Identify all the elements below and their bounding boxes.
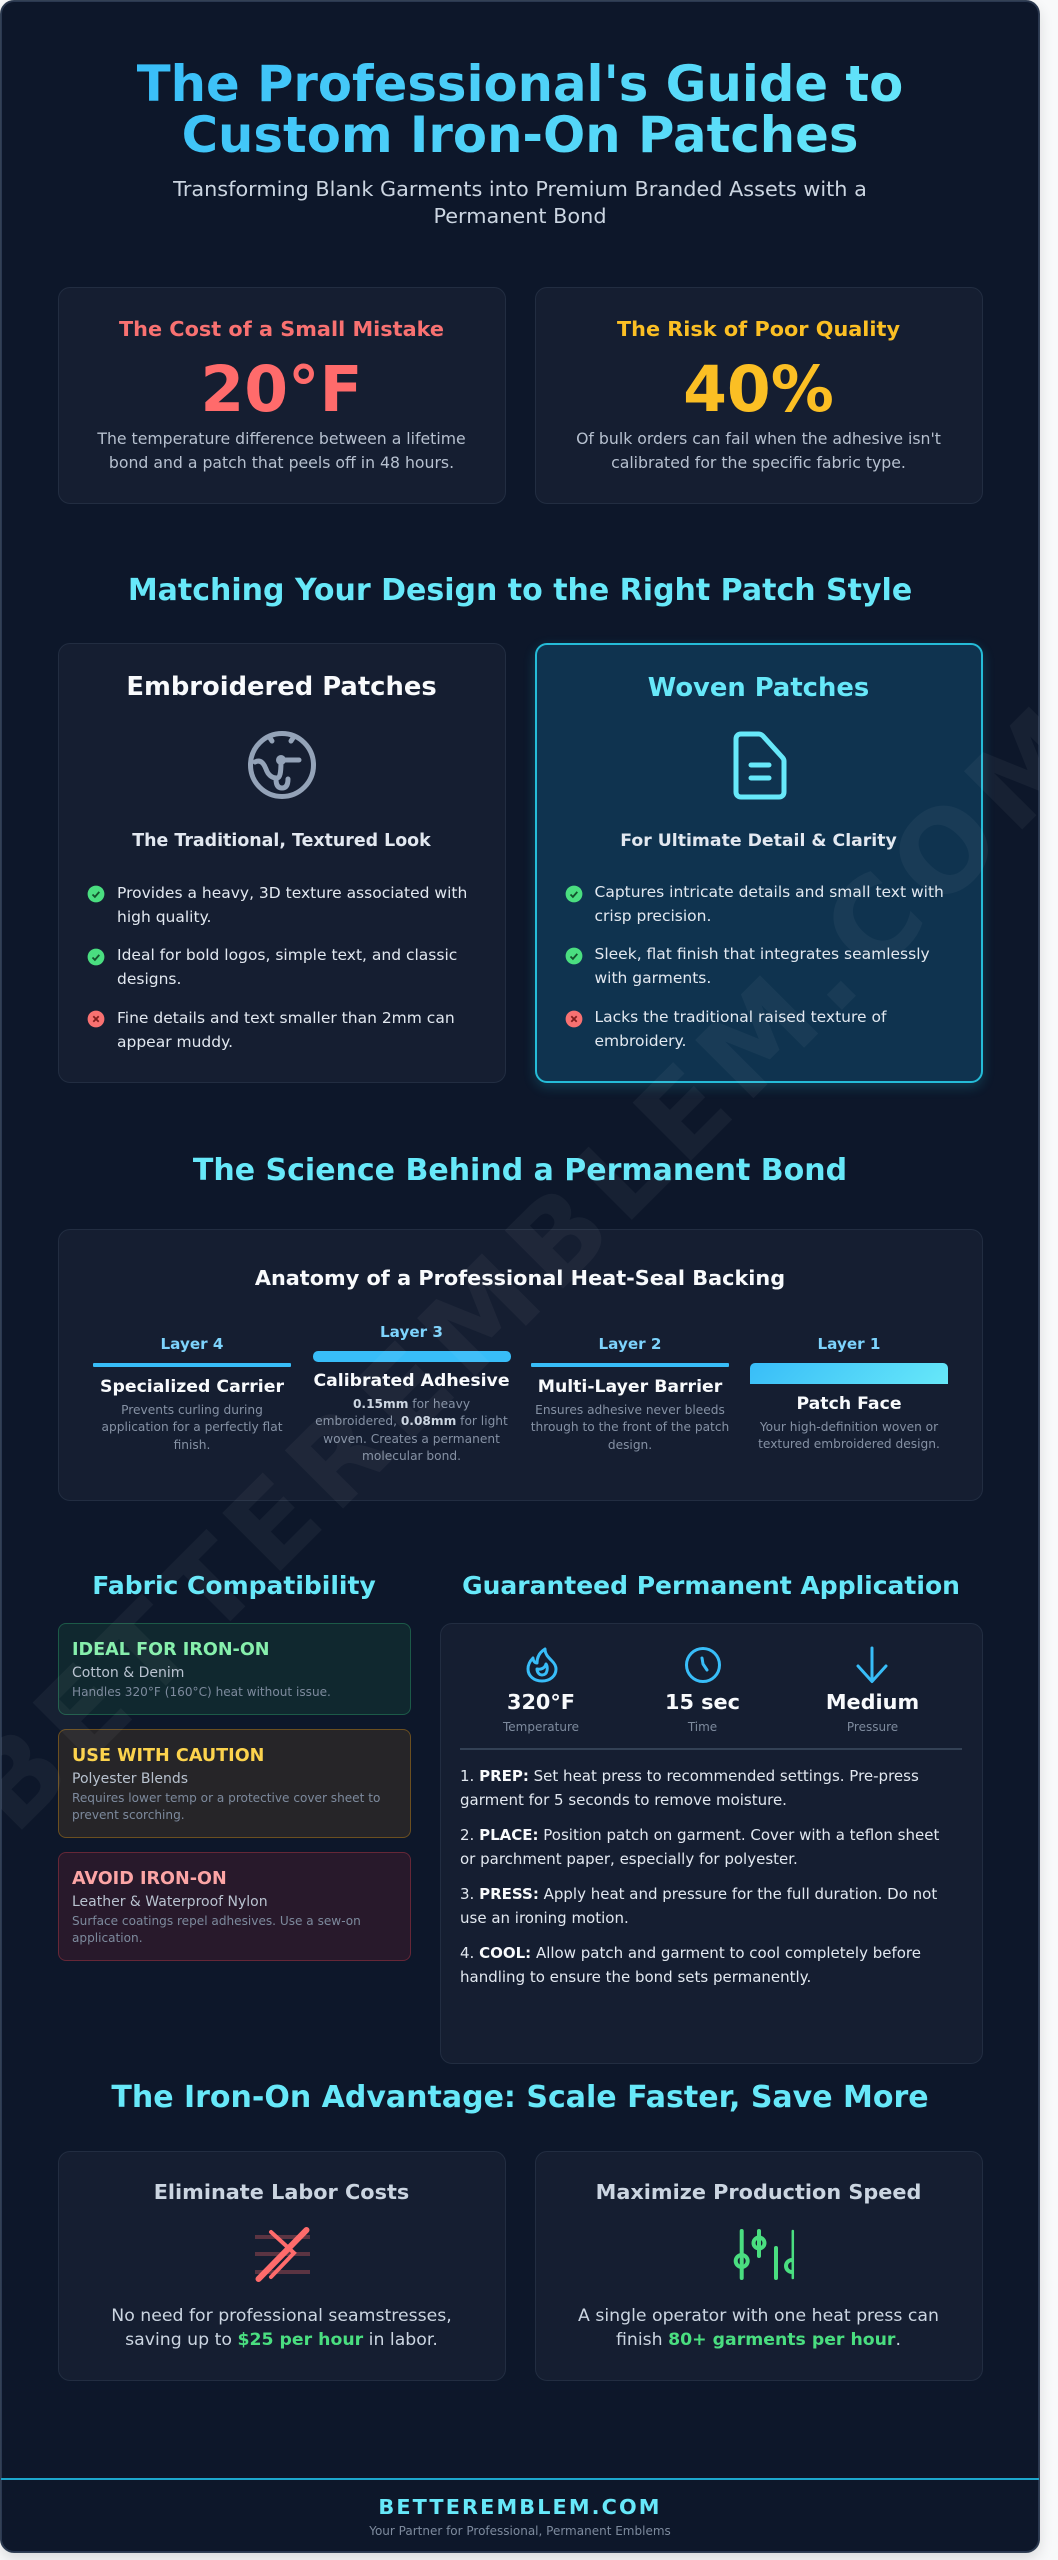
stat value: 20°F [200, 353, 363, 426]
layer label: Layer 4 [160, 1335, 224, 1353]
fabric verdict: USE WITH CAUTION [72, 1746, 264, 1766]
footer [1, 2478, 1039, 2553]
layer label: Layer 1 [817, 1335, 881, 1353]
layer name: Specialized Carrier [100, 1376, 284, 1396]
layer description [102, 1403, 282, 1452]
stat card: risk of poor quality [534, 287, 982, 504]
fabric name: Polyester Blends [72, 1770, 188, 1786]
panel subheading: The Traditional, Textured Look [132, 831, 431, 851]
benefit text: crisp precision. [594, 907, 711, 925]
fabric verdict: AVOID IRON-ON [72, 1869, 227, 1889]
layer description: Ensures adhesive never bleeds [535, 1403, 725, 1417]
panel: woven patches [534, 643, 982, 1083]
fabric card: avoid [58, 1852, 411, 1961]
icon: crossed-out stitching [255, 2227, 310, 2282]
subtitle: Permanent Bond [433, 204, 607, 228]
layer 4 [93, 1335, 291, 1452]
layer description: embroidered, 0.08mm for light [315, 1414, 508, 1428]
fabric note: prevent scorching. [72, 1808, 185, 1822]
card text: No need for professional seamstresses, [111, 2306, 452, 2326]
layer description [758, 1420, 940, 1451]
stat description: bond and a patch that peels off in 48 hours. [109, 453, 454, 472]
footer brand: BETTEREMBLEM.COM [378, 2495, 662, 2519]
subtitle: Transforming Blank Garments into Premium Branded Assets with a [173, 177, 867, 201]
card: eliminate labor costs [58, 2151, 506, 2381]
fabric note: Surface coatings repel adhesives. Use a sew-on [72, 1914, 361, 1928]
card text [111, 2306, 452, 2350]
layer description: finish. [174, 1438, 210, 1452]
layer description: Prevents curling during [121, 1403, 263, 1417]
benefit text: Provides a heavy, 3D texture associated with [117, 884, 467, 902]
drawback text: Fine details and text smaller than 2mm can [117, 1008, 455, 1026]
icon: pressure arrow [856, 1646, 888, 1684]
stat description [97, 429, 466, 472]
card text: finish 80+ garments per hour. [616, 2330, 901, 2350]
step 3: 3. PRESS: Apply heat and pressure for the full duration. Do not [460, 1885, 937, 1903]
layer description [531, 1403, 729, 1452]
drawback text [594, 1008, 887, 1050]
panel: embroidered patches [58, 643, 506, 1083]
drawback text: embroidery. [594, 1032, 686, 1050]
benefit text: designs. [117, 970, 181, 988]
layer description: textured embroidered design. [758, 1437, 940, 1451]
card: maximize production speed [534, 2151, 982, 2381]
fabric name: Leather & Waterproof Nylon [72, 1894, 268, 1910]
fabric note: Requires lower temp or a protective cover sheet to [72, 1791, 380, 1805]
fabric card: ideal [58, 1623, 411, 1715]
benefit text [117, 946, 457, 988]
drawback text: appear muddy. [117, 1033, 233, 1051]
section heading: fabric compatibility: Fabric Compatibility [92, 1571, 376, 1600]
card heading: Eliminate Labor Costs [154, 2180, 409, 2204]
panel subheading: For Ultimate Detail & Clarity [620, 831, 897, 851]
title: The Professional's Guide to [137, 55, 903, 113]
layer label: Layer 2 [598, 1335, 662, 1353]
layer description: molecular bond. [362, 1449, 461, 1463]
benefit text: high quality. [117, 908, 211, 926]
card heading: Maximize Production Speed [596, 2180, 921, 2204]
step 3: use an ironing motion. [460, 1909, 629, 1927]
benefit text: Ideal for bold logos, simple text, and classic [117, 946, 457, 964]
panel: heat-seal backing anatomy [58, 1229, 982, 1501]
fabric note: Handles 320°F (160°C) heat without issue. [72, 1685, 331, 1699]
section heading: application: Guaranteed Permanent Application [462, 1571, 960, 1600]
benefit text: with garments. [594, 969, 711, 987]
step 2: 2. PLACE: Position patch on garment. Cover with a teflon sheet [460, 1826, 939, 1844]
fabric card: caution [58, 1729, 411, 1838]
icon: sliders [734, 2229, 794, 2280]
step 3 [460, 1885, 937, 1927]
step 2 [460, 1826, 940, 1868]
layer description: woven. Creates a permanent [323, 1432, 500, 1446]
divider [460, 1748, 962, 1750]
layer name: Patch Face [796, 1394, 902, 1414]
icon: check [88, 886, 104, 902]
stat value: 40% [683, 353, 834, 426]
layer bar [93, 1363, 291, 1367]
layer bar [312, 1351, 510, 1362]
layer name: Calibrated Adhesive [313, 1370, 510, 1390]
stat heading: The Cost of a Small Mistake [119, 317, 444, 341]
drawback text: Lacks the traditional raised texture of [594, 1008, 886, 1026]
stat: pressure label: Pressure [847, 1720, 898, 1734]
step 1 [460, 1767, 919, 1809]
benefit text: Captures intricate details and small text with [594, 882, 944, 900]
panel heading: Woven Patches [648, 673, 869, 703]
fabric name: Cotton & Denim [72, 1664, 184, 1680]
fabric note: application. [72, 1931, 143, 1945]
stat card: cost of a small mistake [58, 287, 506, 504]
title: Custom Iron-On Patches [182, 106, 858, 164]
stat: pressure value: Medium [826, 1690, 919, 1714]
icon: cross [88, 1010, 104, 1028]
icon: check [566, 886, 582, 902]
icon: cross [566, 1010, 582, 1028]
benefit text [117, 884, 467, 926]
card text: saving up to $25 per hour in labor. [125, 2330, 438, 2350]
stat: time value: 15 sec [665, 1690, 740, 1714]
icon: flame [526, 1647, 558, 1682]
step 4 [460, 1944, 921, 1986]
subtitle [173, 177, 867, 228]
layer description: application for a perfectly flat [102, 1420, 282, 1434]
panel heading: Embroidered Patches [126, 672, 437, 702]
layer name: Multi-Layer Barrier [538, 1376, 722, 1396]
card text [578, 2306, 939, 2350]
layer description: 0.15mm for heavy [353, 1397, 470, 1411]
step 1: garment for 5 seconds to remove moisture. [460, 1791, 787, 1809]
step 4: handling to ensure the bond sets permanently. [460, 1968, 811, 1986]
layer bar [750, 1363, 948, 1384]
layer description: through to the front of the patch [531, 1420, 729, 1434]
card text: A single operator with one heat press can [578, 2306, 939, 2326]
layer 1 [750, 1335, 948, 1451]
section heading: science: The Science Behind a Permanent Bond [193, 1153, 847, 1188]
fabric note [72, 1914, 361, 1945]
step 1: 1. PREP: Set heat press to recommended settings. Pre-press [460, 1767, 919, 1785]
icon: document [734, 732, 786, 800]
section heading: advantage: The Iron-On Advantage: Scale Faster, Save More [111, 2080, 929, 2115]
drawback text [117, 1008, 455, 1051]
stat: temperature value: 320°F [507, 1690, 575, 1714]
benefit text [594, 882, 944, 925]
panel heading: Anatomy of a Professional Heat-Seal Backing [255, 1266, 785, 1290]
stat: temperature label: Temperature [503, 1720, 579, 1734]
stat description: calibrated for the specific fabric type. [611, 453, 906, 472]
stat heading: The Risk of Poor Quality [617, 317, 900, 341]
stat description [576, 429, 941, 472]
layer label: Layer 3 [380, 1323, 443, 1341]
layer description: Your high-definition woven or [760, 1420, 938, 1434]
fabric note [72, 1791, 380, 1822]
layer description: design. [608, 1438, 652, 1452]
layer description [315, 1397, 508, 1463]
icon: check [88, 948, 104, 966]
stat description: Of bulk orders can fail when the adhesive isn't [576, 429, 941, 448]
icon: check [566, 948, 582, 964]
layer 3 [313, 1323, 511, 1463]
layer 2 [531, 1335, 729, 1452]
icon: clock [685, 1647, 721, 1683]
step 4: 4. COOL: Allow patch and garment to cool completely before [460, 1944, 921, 1962]
section heading: patch style: Matching Your Design to the Right Patch Style [128, 573, 912, 608]
benefit text: Sleek, flat finish that integrates seamlessly [594, 945, 930, 963]
title [137, 59, 903, 161]
footer tagline: Your Partner for Professional, Permanent Emblems [369, 2524, 671, 2538]
icon: embroidery hoop [248, 731, 316, 799]
fabric verdict: IDEAL FOR IRON-ON [72, 1640, 270, 1660]
step 2: or parchment paper, especially for polyester. [460, 1850, 798, 1868]
stat description: The temperature difference between a lifetime [97, 429, 466, 448]
stat: time label: Time [688, 1720, 717, 1734]
benefit text [594, 945, 930, 987]
layer bar [531, 1363, 729, 1367]
panel: application steps [440, 1623, 982, 2064]
